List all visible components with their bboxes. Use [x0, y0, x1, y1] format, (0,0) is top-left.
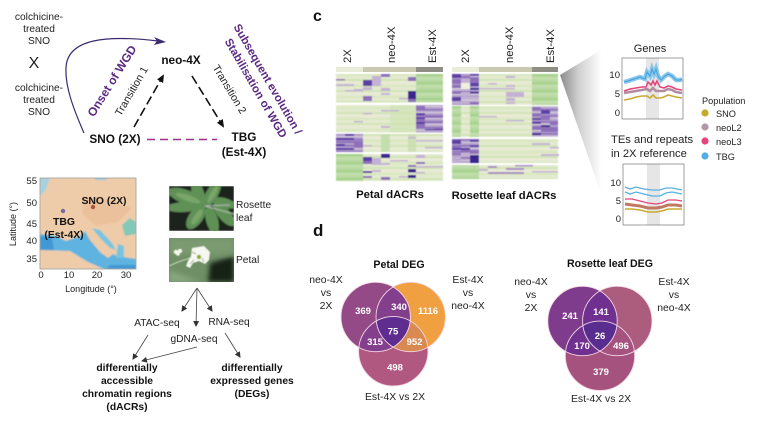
map labels: TBG	[53, 217, 75, 228]
y ticks: 0	[616, 214, 621, 225]
set labels: vs	[669, 290, 679, 301]
column headers: Est-4X	[427, 29, 439, 63]
counts: 379	[593, 367, 609, 378]
heatmap cells	[452, 74, 559, 179]
text: colchicine-treated SNO (bottom): SNO	[28, 107, 50, 118]
y ticks: 5	[615, 89, 620, 100]
text: colchicine-treated SNO (top): SNO	[28, 36, 50, 47]
text: TBG (Est-4X)	[222, 130, 266, 159]
legend: population: SNO	[716, 109, 736, 119]
y ticks: 10	[610, 178, 621, 189]
map markers	[61, 205, 95, 213]
series: TBG	[625, 187, 682, 196]
text: assays: gDNA-seq	[170, 334, 218, 345]
set labels: neo-4X	[514, 277, 548, 288]
heading: TEs and repeats: in 2X reference	[611, 148, 687, 160]
label: rosette leaf	[236, 200, 271, 224]
photo: petal	[169, 238, 234, 282]
set labels	[514, 277, 691, 405]
longitude ticks	[38, 270, 131, 281]
venn diagram: rosette leaf DEG	[514, 258, 691, 405]
series: neoL3	[624, 81, 682, 91]
set labels: 2X	[525, 303, 537, 314]
text: colchicine-treated SNO (bottom): colchicine-	[15, 83, 63, 94]
gradient zoom wedge	[560, 47, 606, 208]
label: rosette leaf: leaf	[236, 213, 253, 224]
column headers	[460, 26, 557, 63]
map labels	[44, 196, 127, 241]
y ticks	[609, 70, 620, 119]
set labels	[309, 275, 485, 403]
latitude ticks: 45	[26, 219, 37, 230]
map image	[40, 178, 136, 269]
counts: 340	[391, 302, 407, 313]
line: SNO to TBG relation	[147, 138, 217, 140]
heading: rosette leaf dACRs: Rosette leaf dACRs	[452, 190, 556, 202]
text: colchicine-treated SNO (bottom)	[15, 83, 63, 118]
label: c: c	[313, 8, 322, 25]
series: neoL2	[624, 88, 682, 93]
arrow: curved WGD onset	[66, 37, 166, 133]
latitude ticks: 50	[26, 198, 37, 209]
arrows: assays to outputs	[133, 333, 240, 361]
text: dACRs: chromatin regions	[82, 389, 172, 400]
series: SNO	[624, 95, 682, 100]
set labels: neo-4X	[657, 303, 691, 314]
legend: population: Population	[702, 96, 745, 106]
column headers: neo-4X	[386, 26, 398, 63]
text: Onset of WGD: Onset of WGD	[85, 43, 140, 119]
text: dACRs: differentially	[96, 363, 158, 374]
counts: 498	[387, 362, 403, 374]
heading: TEs and repeats	[611, 134, 693, 160]
group colour bar	[452, 67, 558, 72]
venn diagram: petal DEG	[309, 259, 485, 403]
map labels: (Est-4X)	[44, 230, 84, 241]
text: neo-4X: neo-4X	[161, 53, 201, 67]
axis label: latitude: Latitude (°)	[8, 202, 18, 246]
counts: 141	[593, 307, 610, 318]
y ticks	[610, 178, 621, 225]
heading: petal dACRs: Petal dACRs	[356, 189, 424, 201]
counts: 170	[574, 341, 590, 352]
text: colchicine-treated SNO (top): colchicine-	[15, 12, 63, 23]
legend: population: neoL2	[716, 123, 742, 133]
line chart: genes	[609, 43, 683, 119]
legend: population: TBG	[716, 152, 735, 162]
text: Transition 2: Transition 2	[210, 63, 248, 116]
arrow: transition 1	[134, 76, 163, 127]
heatmap: rosette leaf dACRs	[452, 26, 559, 179]
set labels: vs	[526, 290, 536, 301]
venn regions	[548, 286, 652, 390]
heatmap: petal dACRs	[336, 26, 443, 181]
text: colchicine-treated SNO (top)	[15, 12, 63, 47]
set labels: 2X	[320, 301, 332, 312]
venn regions	[341, 282, 445, 386]
latitude ticks	[26, 176, 37, 265]
series: TBG	[624, 69, 682, 82]
latitude ticks: 35	[26, 254, 37, 265]
column headers: Est-4X	[545, 29, 557, 63]
arrows: photos to assays	[182, 288, 212, 326]
column headers: 2X	[342, 49, 354, 63]
counts: 369	[355, 306, 371, 317]
y ticks: 10	[609, 70, 620, 81]
latitude ticks: 40	[26, 236, 37, 247]
series: SNO	[625, 209, 682, 212]
text: cross symbol: X	[29, 55, 40, 72]
plot frame	[623, 164, 684, 225]
label: rosette leaf: Rosette	[236, 200, 271, 211]
heading: Petal DEG	[373, 259, 425, 271]
text: Subsequent evolution / Stabilisation of WGD: Stabilisation of WGD	[222, 37, 288, 140]
chart title: Genes	[634, 43, 667, 55]
set labels: Est-4X vs 2X	[365, 392, 425, 403]
photo: rosette leaf	[169, 186, 234, 231]
text: TBG (Est-4X): TBG	[232, 130, 256, 144]
line chart: TEs and repeats	[610, 164, 684, 225]
map labels: SNO (2X)	[81, 196, 127, 207]
counts: 315	[367, 337, 384, 348]
latitude ticks: 55	[26, 176, 37, 187]
legend: population	[701, 96, 745, 162]
y ticks: 5	[616, 196, 621, 207]
counts	[355, 302, 438, 374]
set labels: Est-4X	[452, 275, 484, 286]
set labels: neo-4X	[451, 301, 485, 312]
set labels: Est-4X	[658, 277, 690, 288]
heatmap cells	[336, 74, 443, 181]
text: SNO (2X): SNO (2X)	[89, 132, 141, 146]
text: assays: ATAC-seq	[134, 318, 180, 329]
set labels: vs	[321, 288, 331, 299]
counts: 952	[407, 337, 422, 348]
set labels: Est-4X vs 2X	[571, 394, 631, 405]
heading: Rosette leaf DEG	[567, 258, 653, 270]
text: dACRs	[82, 363, 172, 413]
heading: TEs and repeats: TEs and repeats	[611, 134, 693, 146]
series: neoL3	[625, 199, 682, 204]
column headers: neo-4X	[504, 26, 516, 63]
text: dACRs: accessible	[101, 376, 153, 387]
set labels: neo-4X	[309, 275, 343, 286]
text: dACRs: (dACRs)	[106, 402, 148, 413]
text: DEGs: (DEGs)	[235, 389, 269, 400]
plot frame	[622, 58, 683, 119]
legend: population: neoL3	[716, 137, 742, 147]
label: d: d	[313, 221, 323, 240]
counts: 496	[613, 341, 629, 352]
text: Subsequent evolution / Stabilisation of WGD: Subsequent evolution /	[231, 22, 304, 137]
longitude ticks: 30	[121, 270, 131, 281]
longitude ticks: 10	[64, 270, 74, 281]
text: DEGs: expressed genes	[210, 376, 294, 387]
panel: polyploid crossing scheme	[15, 12, 304, 159]
text: TBG (Est-4X): (Est-4X)	[222, 145, 266, 159]
text: DEGs: differentially	[221, 363, 283, 374]
text: assays	[134, 317, 250, 345]
longitude ticks: 20	[92, 270, 102, 281]
panel: map of populations	[8, 176, 136, 294]
set labels: vs	[463, 288, 473, 299]
y ticks: 0	[615, 108, 620, 119]
counts: 75	[388, 326, 399, 338]
series: neoL2	[625, 204, 682, 208]
counts: 1116	[418, 306, 438, 317]
text: DEGs	[210, 363, 294, 400]
counts	[562, 307, 629, 378]
text: Transition 1: Transition 1	[113, 65, 151, 118]
column headers	[342, 26, 439, 63]
text: colchicine-treated SNO (bottom): treated	[23, 95, 55, 106]
group colour bar	[336, 67, 443, 72]
text: assays: RNA-seq	[208, 317, 250, 328]
text: colchicine-treated SNO (top): treated	[23, 24, 55, 35]
column headers: 2X	[460, 49, 472, 63]
arrow: transition 2	[192, 76, 223, 126]
label: petal: Petal	[236, 255, 259, 266]
counts: 241	[562, 311, 579, 322]
counts: 26	[595, 331, 605, 342]
axis label: longitude: Longitude (°)	[65, 284, 117, 294]
longitude ticks: 0	[38, 270, 44, 281]
